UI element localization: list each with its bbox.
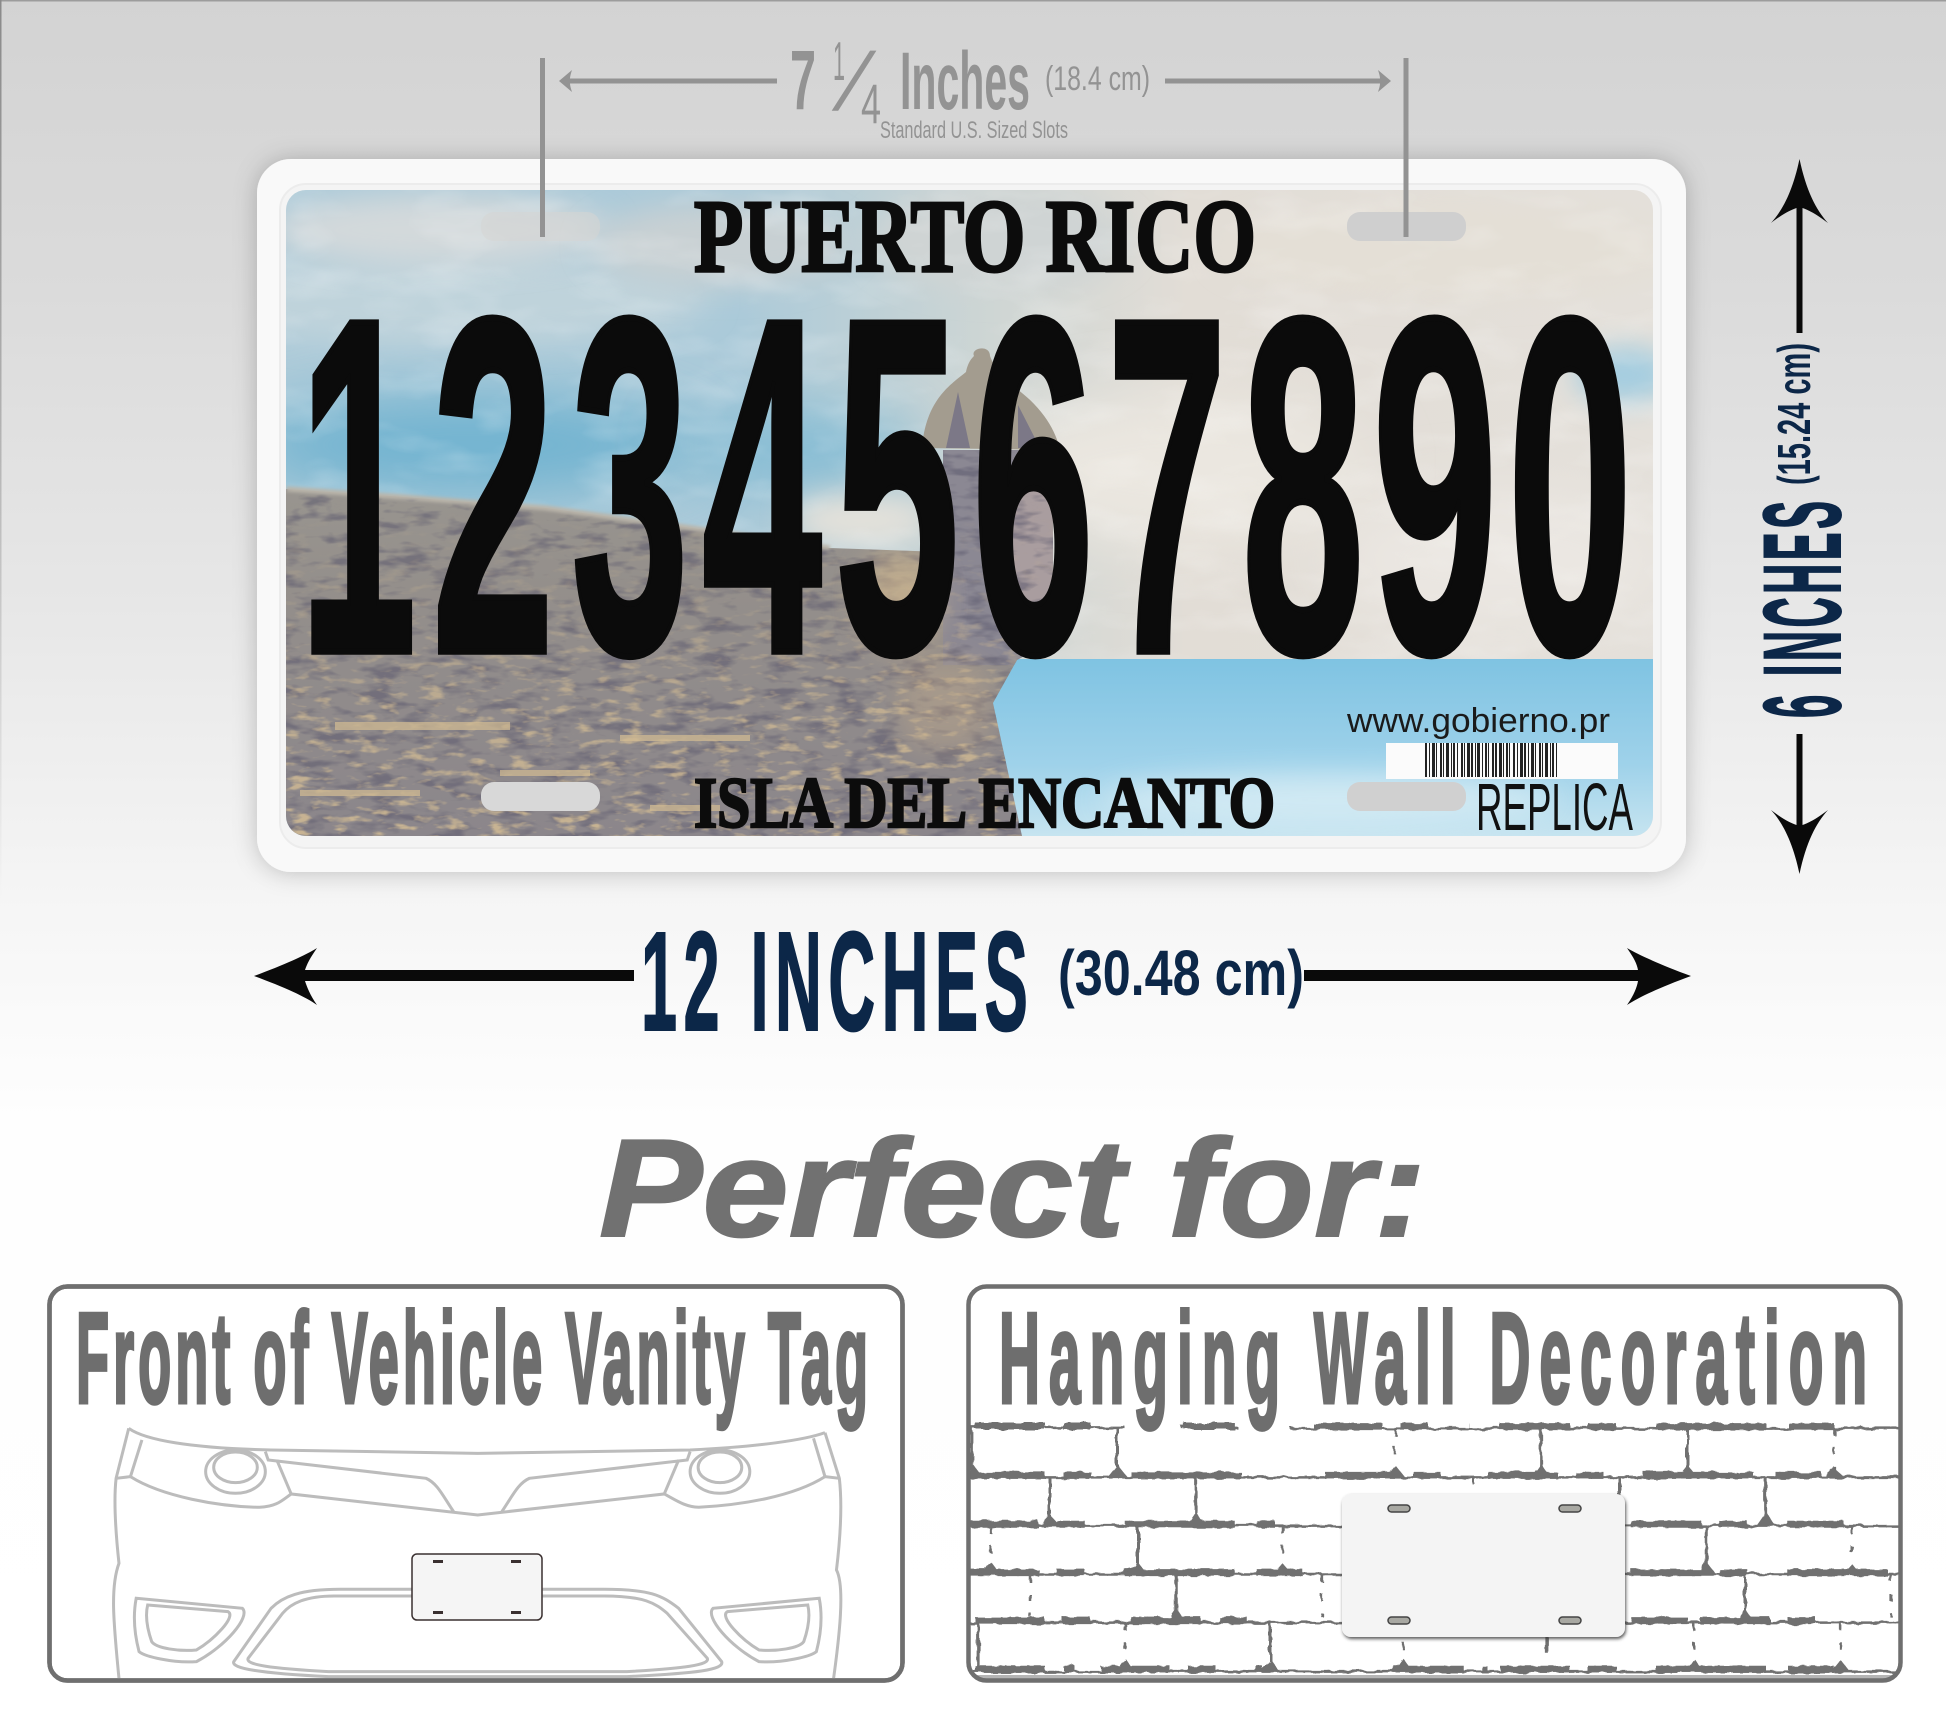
fort wall: [286, 450, 1066, 840]
panel outline: [50, 1286, 902, 1680]
plate number digits: 1: [300, 220, 416, 754]
plate number digits: 8: [1242, 219, 1364, 753]
width arrow left: [254, 948, 634, 1005]
heading: perfect for: Perfect for:: [599, 1111, 1426, 1266]
website: www.gobierno.pr: [1346, 702, 1610, 740]
slot spacing label: /: [826, 35, 882, 127]
slot spacing label: Standard U.S. Sized Slots: [880, 117, 1068, 144]
plate photo: fort and sea: [190, 190, 1680, 840]
replica mark: REPLICA: [1476, 770, 1633, 845]
slot spacing label: 4: [861, 72, 881, 135]
slot spacing left tick: [540, 58, 545, 237]
mounting slots: [481, 212, 1466, 811]
plate number digits: 0: [1508, 220, 1632, 754]
width dimension arrow: [254, 904, 1691, 1061]
small plate on wall: [1342, 1494, 1625, 1637]
state name: PUERTO RICO: [694, 179, 1256, 294]
panel outline: [968, 1286, 1900, 1680]
panel: front of vehicle vanity tag: [50, 1285, 902, 1680]
panel heading: Front of Vehicle Vanity Tag: [76, 1285, 868, 1430]
height arrow bottom: [1771, 734, 1828, 874]
car front outline: [114, 1428, 841, 1678]
slot spacing left arrow: [559, 70, 777, 92]
panel frame: [50, 1286, 902, 1680]
height dimension arrow: [1741, 159, 1864, 874]
plate white base: [257, 159, 1686, 872]
plate number digits: 4: [702, 218, 823, 753]
wall top highlight: [286, 489, 830, 548]
slot spacing label: [790, 30, 1150, 144]
plate number digits: [300, 218, 1632, 754]
small plate on car: [412, 1554, 542, 1620]
height label: 6 INCHES: [1741, 501, 1864, 718]
turret dome: [922, 348, 1060, 450]
height arrow top: [1771, 159, 1828, 333]
sea: [975, 659, 1653, 836]
barcode: [1386, 743, 1618, 779]
panel: hanging wall decoration: [966, 1286, 1903, 1680]
height metric label: (15.24 cm): [1768, 343, 1820, 485]
width metric label: (30.48 cm): [1058, 937, 1304, 1009]
slot spacing label: Inches: [900, 36, 1030, 127]
plate number digits: 6: [972, 219, 1094, 753]
license plate: [190, 159, 1686, 872]
slot spacing dimension: [540, 30, 1408, 237]
slot spacing label: 7: [790, 33, 816, 127]
plate number digits: 5: [835, 220, 959, 754]
slot spacing label: (18.4 cm): [1045, 60, 1150, 98]
panel frame: [968, 1286, 1900, 1680]
plate number digits: 7: [1107, 218, 1227, 753]
plate embossed rim: [280, 184, 1661, 848]
plate number digits: 3: [572, 220, 688, 754]
panel heading: Hanging Wall Decoration: [999, 1287, 1867, 1431]
plate number digits: 2: [432, 219, 554, 753]
slot spacing right arrow: [1165, 70, 1391, 92]
slot spacing right tick: [1404, 58, 1408, 237]
plate number digits: 9: [1373, 220, 1497, 754]
motto: ISLA DEL ENCANTO: [694, 763, 1275, 843]
width label: 12 INCHES: [641, 904, 1028, 1061]
brick wall drawing: [966, 1426, 1903, 1680]
slot spacing label: 1: [833, 30, 845, 92]
width arrow right: [1304, 948, 1691, 1005]
